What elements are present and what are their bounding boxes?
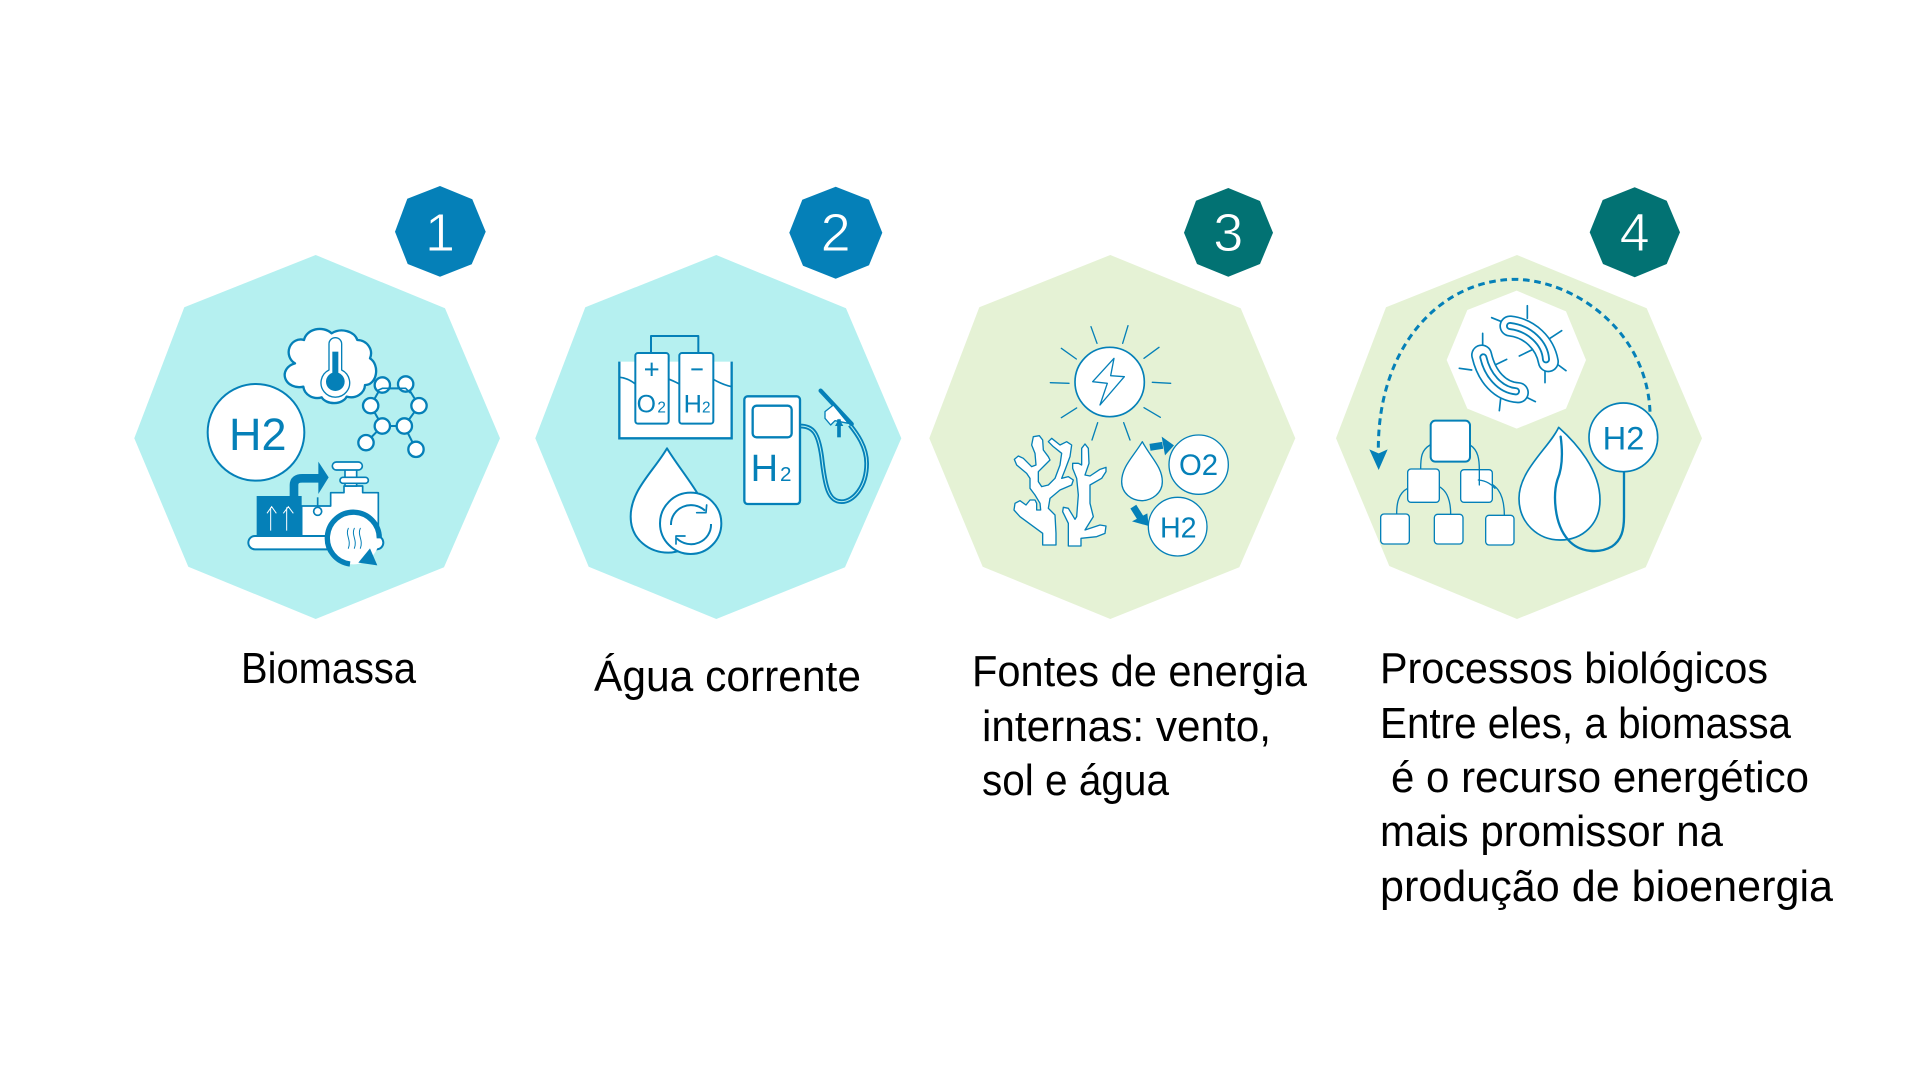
icon: hydrogen pump: H (751, 448, 778, 490)
number badge 2 (789, 187, 882, 279)
icon: biological process (1369, 279, 1658, 551)
icon: molecule (358, 376, 427, 457)
number badge 3: 3 (1213, 203, 1243, 263)
icon: electrolysis tank: H (684, 390, 702, 418)
icon: gasification plant (248, 462, 383, 565)
label: Água corrente: Água corrente (594, 652, 861, 701)
panel: processos biologicos (1336, 187, 1834, 911)
arrow: dashed cycle (1369, 279, 1650, 470)
icon: leaf drop (1519, 427, 1624, 551)
label: Fontes de energia (972, 647, 1307, 805)
label: Fontes de energia: internas: vento, (982, 702, 1271, 751)
icon: H2 circle (1148, 497, 1207, 556)
number badge 4 (1590, 187, 1680, 277)
icon: H2 circle: H2 (1160, 512, 1197, 544)
label: Processos biológicos: produção de bioenergia (1380, 862, 1834, 911)
number badge 2: 2 (821, 203, 851, 263)
icon: H2 circle: H2 (229, 409, 287, 460)
icon: water drop splitting (1122, 437, 1174, 526)
icon: O2 circle: O2 (1179, 449, 1218, 482)
icon: cloud with thermometer (285, 329, 376, 403)
icon: renewable energy to hydrogen (1014, 326, 1228, 556)
icon: H2 circle (208, 384, 304, 481)
number badge 1: 1 (425, 203, 455, 263)
label: Processos biológicos: Entre eles, a biomassa (1380, 699, 1791, 748)
label: Fontes de energia: sol e água (982, 756, 1169, 805)
label: Processos biológicos: é o recurso energético (1391, 753, 1809, 802)
panel: agua corrente (535, 187, 901, 701)
icon: O2 circle (1169, 435, 1228, 494)
icon: electrolysis tank: O (637, 390, 656, 418)
icon: electrolysis tank: 2 (702, 399, 711, 416)
icon: white octagon with bacteria (1447, 291, 1586, 429)
label: Processos biológicos: Processos biológicos (1380, 644, 1768, 693)
label: Processos biológicos (1380, 644, 1834, 911)
number badge 3 (1184, 188, 1273, 277)
octagon background 4 (1336, 255, 1702, 619)
icon: biomass to hydrogen (208, 329, 427, 565)
icon: sun with lightning bolt (1050, 326, 1171, 440)
icon: hydrogen pump: 2 (780, 463, 791, 486)
icon: H2 circle (1589, 403, 1658, 472)
icon: electrolysis tank (619, 336, 732, 438)
label: Fontes de energia: Fontes de energia (972, 647, 1307, 696)
icon: electrolysis tank: 2 (657, 399, 666, 416)
panel: fontes de energia (929, 188, 1307, 805)
panel: biomassa (134, 186, 500, 693)
octagon background 3 (929, 255, 1295, 619)
label: Biomassa: Biomassa (241, 644, 416, 693)
octagon background 1 (134, 255, 500, 619)
number badge 4: 4 (1620, 203, 1650, 263)
icon: coral (1014, 436, 1106, 546)
label: Processos biológicos: mais promissor na (1380, 807, 1724, 856)
number badge 1 (395, 186, 486, 277)
octagon background 2 (535, 255, 901, 619)
icon: hydrogen pump (744, 391, 867, 504)
icon: water drop with cycle (631, 448, 721, 554)
icon: electrolysis, water and pump (619, 336, 867, 554)
icon: tree diagram (1381, 421, 1514, 545)
icon: H2 circle: H2 (1603, 419, 1644, 456)
